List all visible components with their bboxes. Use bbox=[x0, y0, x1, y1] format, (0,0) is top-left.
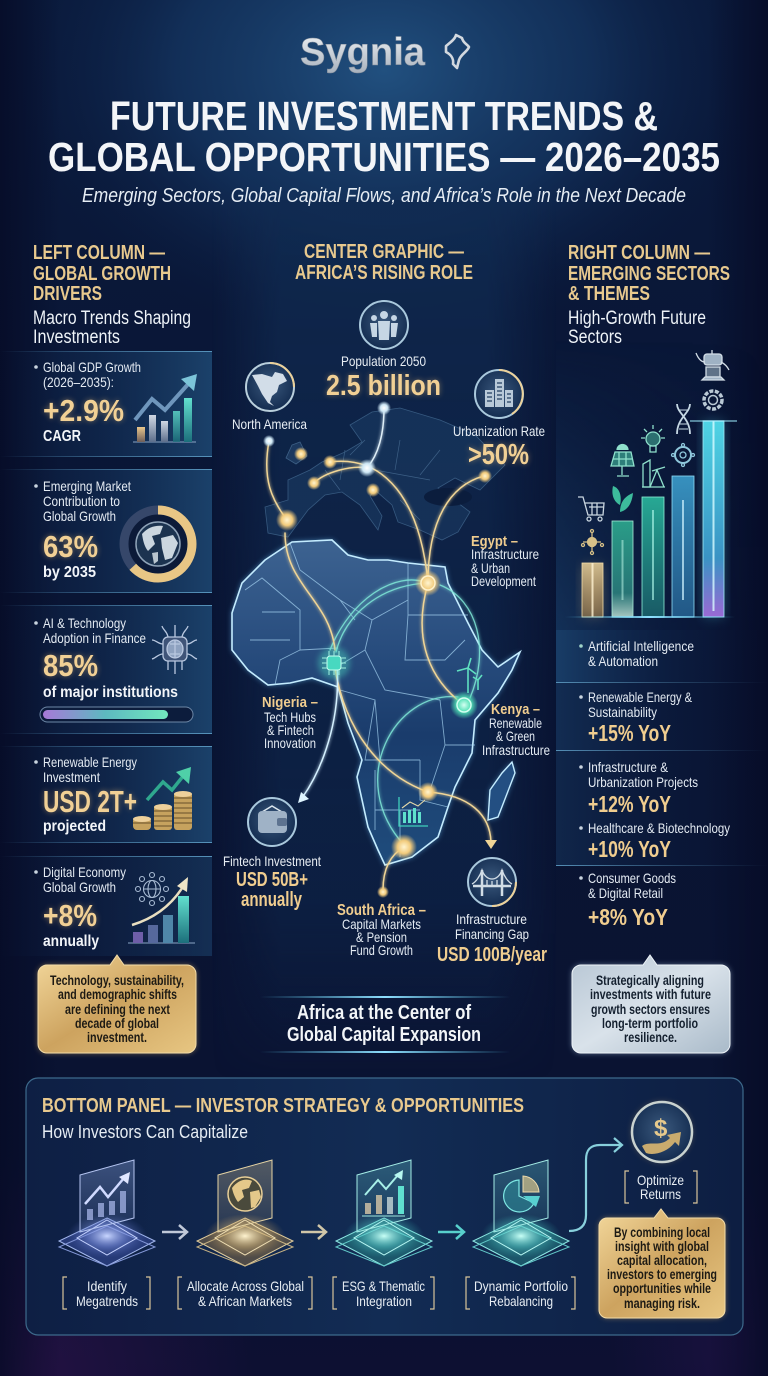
label: dynamic rebalancing bbox=[466, 1277, 575, 1309]
card: renewable energy sector: +15% YoY bbox=[588, 720, 671, 746]
center heading bbox=[295, 241, 473, 284]
card: renewable energy investment: projected bbox=[43, 818, 106, 835]
left column heading: GLOBAL GROWTH bbox=[33, 263, 171, 285]
map nodes bbox=[263, 401, 492, 898]
callout: right silver note bbox=[572, 955, 730, 1053]
label: South Africa: Fund Growth bbox=[350, 942, 413, 958]
left column heading: Macro Trends Shaping bbox=[33, 308, 191, 329]
arrow: step 3 to 4 bbox=[438, 1225, 464, 1239]
label: Kenya: Infrastructure bbox=[482, 742, 550, 758]
logo: Sygnia: Sygnia bbox=[300, 31, 425, 74]
population stat bbox=[326, 353, 441, 402]
icon: teal chart bbox=[362, 1170, 405, 1216]
card: AI and technology adoption: of major institutions bbox=[43, 684, 178, 701]
card: digital economy growth: annually bbox=[43, 933, 99, 950]
label: Nigeria bbox=[262, 694, 318, 751]
callout: right silver note: growth sectors ensures bbox=[591, 1002, 710, 1017]
callout: bottom gold note bbox=[599, 1209, 725, 1318]
progress bar: 85 percent bbox=[40, 707, 193, 722]
step: ESG integration bbox=[333, 1160, 434, 1309]
card: digital economy growth: +8% bbox=[43, 898, 97, 933]
left column heading: DRIVERS bbox=[33, 283, 102, 305]
card: artificial intelligence: Artificial Intelligence bbox=[588, 638, 694, 654]
center tagline: Africa at the Center of bbox=[297, 1002, 471, 1024]
icon: Nigeria tech chip bbox=[318, 647, 350, 679]
card: AI and technology adoption: AI & Technology bbox=[43, 615, 126, 631]
card: AI and technology adoption bbox=[0, 605, 212, 734]
population stat: Population 2050 bbox=[341, 353, 426, 369]
card: digital economy growth: Global Growth bbox=[43, 879, 116, 895]
icon: DNA bbox=[677, 404, 690, 434]
icon: network star bbox=[582, 530, 604, 554]
card: renewable energy investment: USD 2T+ bbox=[43, 784, 137, 819]
callout: bottom gold note: opportunities while bbox=[613, 1281, 711, 1296]
fintech stat bbox=[223, 853, 321, 911]
icon: gold globe bbox=[228, 1177, 262, 1211]
callout: bottom gold note: capital allocation, bbox=[617, 1253, 707, 1268]
population stat: 2.5 billion bbox=[326, 370, 441, 402]
card: healthcare sector: +10% YoY bbox=[588, 836, 671, 862]
center heading: AFRICA’S RISING ROLE bbox=[295, 262, 473, 284]
card: emerging market contribution bbox=[0, 469, 212, 593]
card: AI and technology adoption: 85% bbox=[43, 648, 98, 683]
label: Egypt: & Urban bbox=[471, 560, 510, 576]
icon: rising bar chart bbox=[133, 374, 197, 442]
urbanization stat: >50% bbox=[468, 439, 529, 471]
arrow: step 2 to 3 bbox=[301, 1225, 326, 1239]
card: renewable energy investment: Investment bbox=[43, 769, 100, 785]
icon: bridge bbox=[468, 858, 516, 906]
subtitle: Emerging Sectors, Global Capital Flows, and Africa’s Role in the Next Decade bbox=[82, 185, 686, 207]
sector icons bbox=[578, 350, 729, 554]
card: consumer goods sector: +8% YoY bbox=[588, 904, 668, 930]
label: dynamic rebalancing: Rebalancing bbox=[489, 1293, 553, 1309]
card: infrastructure sector: Urbanization Projects bbox=[588, 774, 698, 790]
icon: population bbox=[360, 301, 408, 349]
country borders bbox=[245, 543, 475, 857]
label: Nigeria: Innovation bbox=[264, 735, 316, 751]
card: emerging market contribution: 63% bbox=[43, 529, 98, 564]
label: Egypt: Development bbox=[471, 573, 536, 589]
arrow: step 1 to 2 bbox=[162, 1225, 187, 1239]
center heading: CENTER GRAPHIC — bbox=[304, 241, 464, 263]
card: renewable energy investment bbox=[0, 746, 212, 843]
card: consumer goods sector: Consumer Goods bbox=[588, 870, 676, 886]
map: Africa bbox=[232, 540, 520, 865]
infrastructure stat: Financing Gap bbox=[455, 926, 529, 942]
label: ESG integration: ESG & Thematic bbox=[342, 1278, 425, 1294]
icon: wallet bbox=[248, 798, 296, 846]
card: AI and technology adoption: Adoption in Finance bbox=[43, 630, 146, 646]
callout: bottom gold note: By combining local bbox=[614, 1225, 710, 1240]
card: renewable energy sector bbox=[556, 683, 768, 751]
callout: bottom gold note: investors to emerging bbox=[607, 1267, 717, 1282]
card: global GDP growth: Global GDP Growth bbox=[43, 359, 141, 375]
card: global GDP growth: +2.9% bbox=[43, 393, 124, 428]
right column heading bbox=[568, 242, 730, 348]
panel: right column bbox=[556, 245, 752, 1057]
panel: left column bbox=[0, 200, 212, 1060]
card: emerging market contribution: Contribution to bbox=[43, 493, 120, 509]
card: renewable energy sector: Renewable Energy & bbox=[588, 689, 693, 705]
icon: coin stacks and arrow bbox=[133, 767, 192, 830]
card: artificial intelligence bbox=[556, 630, 768, 683]
card: renewable energy investment: Renewable Energy bbox=[43, 754, 137, 770]
card: renewable energy sector: Sustainability bbox=[588, 704, 657, 720]
bottom heading bbox=[42, 1095, 524, 1142]
card: digital economy growth bbox=[0, 856, 212, 956]
right column heading: & THEMES bbox=[568, 283, 650, 305]
label: Kenya: Kenya – bbox=[491, 701, 540, 718]
label: Nigeria: Nigeria – bbox=[262, 694, 318, 711]
callout: bottom gold note: insight with global bbox=[615, 1239, 709, 1254]
label: Nigeria: Tech Hubs bbox=[264, 709, 316, 725]
label: South Africa bbox=[337, 902, 426, 958]
urbanization stat bbox=[453, 423, 545, 471]
label: South Africa: Capital Markets bbox=[342, 916, 421, 932]
label: Kenya bbox=[482, 701, 550, 758]
label: allocate across markets: & African Markets bbox=[198, 1293, 292, 1309]
card: healthcare sector: Healthcare & Biotechnology bbox=[588, 820, 730, 836]
card: consumer goods sector: & Digital Retail bbox=[588, 885, 663, 901]
card: infrastructure sector bbox=[556, 751, 768, 821]
fintech stat: annually bbox=[241, 889, 303, 911]
callout: right silver note: long-term portfolio bbox=[602, 1016, 698, 1031]
infrastructure stat: Infrastructure bbox=[456, 911, 527, 927]
callout: right silver note: resilience. bbox=[624, 1030, 677, 1045]
icon: gear bbox=[704, 391, 722, 409]
label: Egypt: Egypt – bbox=[471, 533, 518, 550]
left column heading: LEFT COLUMN — bbox=[33, 242, 165, 264]
card: global GDP growth: (2026–2035): bbox=[43, 374, 114, 390]
label: ESG integration: Integration bbox=[356, 1293, 412, 1309]
right column heading: High-Growth Future bbox=[568, 308, 706, 329]
card: artificial intelligence: & Automation bbox=[588, 653, 658, 669]
step: allocate across markets bbox=[178, 1160, 312, 1309]
icon: shopping cart bbox=[578, 497, 604, 521]
icon: trend chart bbox=[85, 1172, 130, 1220]
callout: left gold note: are defining the next bbox=[65, 1002, 170, 1017]
icon: optimize returns coin: $ bbox=[654, 1115, 668, 1142]
label: identify megatrends bbox=[63, 1277, 150, 1309]
label: Kenya: Renewable bbox=[489, 715, 542, 731]
card: emerging market contribution: Emerging Market bbox=[43, 478, 131, 494]
card: emerging market contribution: Global Growth bbox=[43, 508, 116, 524]
step: dynamic rebalancing bbox=[466, 1160, 575, 1309]
icon: Kenya wind turbine bbox=[457, 658, 482, 693]
callout: right silver note: investments with future bbox=[590, 987, 711, 1002]
card: infrastructure sector: Infrastructure & bbox=[588, 759, 669, 775]
label: ESG integration bbox=[333, 1277, 434, 1309]
center tagline bbox=[260, 996, 510, 1053]
card: healthcare sector bbox=[556, 820, 768, 866]
icon: urbanization bbox=[475, 370, 523, 418]
panel: center graphic bbox=[223, 241, 550, 1053]
label: North America: North America bbox=[232, 416, 307, 432]
infrastructure stat: USD 100B/year bbox=[437, 944, 547, 966]
panel: bottom investor strategy bbox=[26, 1078, 743, 1335]
fintech stat: USD 50B+ bbox=[236, 869, 308, 891]
title bbox=[48, 93, 720, 180]
label: South Africa: South Africa – bbox=[337, 902, 426, 919]
map: Europe bbox=[265, 408, 505, 540]
icon: optimize returns coin bbox=[631, 1101, 693, 1163]
label: South Africa: & Pension bbox=[356, 929, 407, 945]
callout: left gold note: Technology, sustainability, bbox=[50, 973, 184, 988]
label: Nigeria: & Fintech bbox=[267, 722, 314, 738]
bottom heading: BOTTOM PANEL — INVESTOR STRATEGY & OPPORTUNITIES bbox=[42, 1095, 524, 1117]
step: identify megatrends bbox=[59, 1160, 155, 1309]
bar chart: sector growth bbox=[565, 350, 737, 618]
fintech stat: Fintech Investment bbox=[223, 853, 321, 869]
callout: right silver note: Strategically aligning bbox=[596, 973, 704, 988]
arrow: to optimize returns bbox=[569, 1138, 622, 1231]
icon: pie chart bbox=[504, 1176, 540, 1212]
bottom heading: How Investors Can Capitalize bbox=[42, 1122, 248, 1142]
label: Kenya: & Green bbox=[496, 728, 535, 744]
card: emerging market contribution: by 2035 bbox=[43, 564, 96, 581]
icon: solar panel bbox=[611, 444, 634, 476]
icon: AI chip bbox=[152, 625, 197, 674]
infrastructure stat bbox=[437, 911, 547, 966]
urbanization stat: Urbanization Rate bbox=[453, 423, 545, 439]
callout: left gold note bbox=[38, 955, 196, 1053]
label: optimize returns: Optimize bbox=[637, 1172, 684, 1188]
card: digital economy growth: Digital Economy bbox=[43, 864, 126, 880]
center tagline: Global Capital Expansion bbox=[287, 1024, 481, 1046]
icon: globe network and bars bbox=[128, 872, 195, 943]
icon: South Africa chart bbox=[399, 797, 428, 826]
title: FUTURE INVESTMENT TRENDS & bbox=[110, 93, 658, 139]
label: identify megatrends: Megatrends bbox=[76, 1293, 138, 1309]
icon: North America bbox=[246, 363, 294, 411]
card: consumer goods sector bbox=[579, 870, 676, 930]
callout: left gold note: investment. bbox=[87, 1030, 147, 1045]
card: global GDP growth: CAGR bbox=[43, 428, 81, 445]
label: optimize returns: Returns bbox=[640, 1186, 681, 1202]
right column heading: RIGHT COLUMN — bbox=[568, 242, 710, 264]
label: dynamic rebalancing: Dynamic Portfolio bbox=[474, 1278, 568, 1294]
label: allocate across markets: Allocate Across Global bbox=[187, 1278, 304, 1294]
label: allocate across markets bbox=[178, 1277, 312, 1309]
label: Egypt bbox=[471, 533, 539, 589]
left column heading: Investments bbox=[33, 327, 120, 348]
right column heading: Sectors bbox=[568, 327, 622, 348]
callout: bottom gold note: managing risk. bbox=[624, 1296, 700, 1311]
label: identify megatrends: Identify bbox=[87, 1278, 127, 1294]
left column heading bbox=[33, 242, 191, 348]
callout: left gold note: and demographic shifts bbox=[58, 987, 177, 1002]
icon: robot bbox=[696, 350, 729, 380]
callout: left gold note: decade of global bbox=[75, 1016, 159, 1031]
card: global GDP growth bbox=[0, 351, 212, 457]
card: infrastructure sector: +12% YoY bbox=[588, 791, 671, 817]
label: Egypt: Infrastructure bbox=[471, 546, 539, 562]
connector arcs bbox=[267, 408, 491, 890]
icon: energy site bbox=[642, 460, 665, 487]
icon: medical gear bbox=[672, 444, 694, 466]
icon: leaf bbox=[612, 486, 633, 512]
label: optimize returns bbox=[625, 1171, 697, 1203]
icon: light bulb bbox=[641, 425, 665, 452]
arrowheads bbox=[298, 792, 497, 849]
donut chart: 63 percent with globe bbox=[124, 510, 192, 578]
